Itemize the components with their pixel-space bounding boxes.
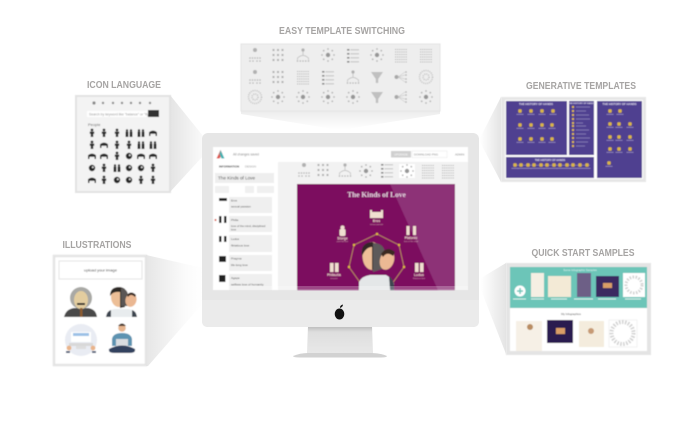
stand neck [307,326,373,353]
template: middle list: THE HISTORY OF HANDS [568,102,595,105]
sidebar row: Ludus [219,235,272,252]
sidebar row: Philia [214,216,272,232]
connector: template switching shadow [241,111,440,130]
teal banner [510,267,647,308]
app logo [216,150,224,158]
template: right poster [597,101,642,178]
chin [202,300,479,327]
save status: All changes saved [233,152,259,156]
category label: People [88,122,101,127]
sidebar row: Pragma: Pragma [231,256,242,260]
node: Platonic: Platonic [405,236,418,240]
node: Platonic: love of the mind [404,240,418,243]
sidebar: INFORMATION [219,164,239,168]
apple logo [335,304,344,320]
connector: illustrations shadow [146,255,203,366]
connector: quick start shadow [481,263,506,354]
sidebar row: Ludus: flirtatious love [231,244,250,248]
sample cards [531,273,544,297]
node: Ludus [413,263,426,280]
heading: generative templates: GENERATIVE TEMPLATES [526,81,636,92]
illustration: Einstein [64,287,97,317]
sidebar row: Agape [219,274,272,290]
heading: illustrations: ILLUSTRATIONS [62,240,132,251]
panel: template switching [241,44,440,111]
sidebar row: Agape: selfless love of humanity [231,282,264,286]
template: left poster: THE HISTORY OF HANDS [519,102,553,106]
sidebar row: Pragma: life-long love [231,263,248,267]
template thumbnails [248,48,433,104]
panel: generative templates [501,97,646,182]
node: Eros: Eros [373,219,380,223]
sidebar row: Philia: love of the mind, disciplined [231,224,266,228]
node: Platonic [404,226,418,243]
sidebar: The Kinds of Love [218,176,255,180]
search bar: Search by keyword like "balance" or "fly" [89,112,151,116]
toolbar buttons: UPGRADE [394,152,408,156]
illustration: person with laptop [109,324,135,353]
saved cards [516,320,637,351]
icon tabs [92,101,151,105]
add button [514,286,526,296]
node: Storge [337,226,349,243]
connector: icon language shadow [170,95,203,192]
teal banner: Some Infographic Samples [563,268,597,272]
toolbar buttons [391,151,464,158]
template picker [298,163,454,178]
illustration: laptop circle [65,324,97,356]
connector: generative templates shadow [480,97,501,182]
sidebar [214,162,468,290]
node: Storge: parental love [337,240,349,243]
sidebar row: Philia: Philia [231,218,239,222]
template: right poster: THE HISTORY OF HANDS [603,102,637,106]
sidebar row: Eros: Eros [231,198,238,202]
toolbar buttons: DOWNLOAD PNG [414,152,439,156]
heading: icon language: ICON LANGUAGE [87,80,161,91]
sidebar row: Philia: love [231,228,237,232]
stand base [293,353,387,358]
canvas title: The Kinds of Love [347,190,406,199]
node: Philautia: Philautia [327,273,341,277]
screen [213,147,468,290]
panel: quick start samples [506,263,651,355]
heading: easy template switching: EASY TEMPLATE SWITCHING [279,26,405,37]
illustration: two faces [106,287,138,317]
node: Ludus: Ludus [414,273,424,277]
toolbar buttons: ADMIN [455,152,464,156]
heptagon with portrait [348,233,405,290]
screen fade [213,286,468,290]
infographic canvas [297,184,455,290]
node: Ludus: flirtatious love [413,277,426,280]
section label: My Infographics [561,312,581,316]
upload box: upload your image [84,268,118,272]
template: bottom strip: THE HISTORY OF HANDS [535,159,566,162]
heading: quick start samples: QUICK START SAMPLES [532,248,635,259]
sidebar row: Agape: Agape [231,276,240,280]
panel: icon language [76,96,170,192]
icon grid [88,129,157,184]
node: Eros [370,210,383,226]
sidebar row: Eros: sexual passion [231,204,251,208]
sample label row [513,298,641,300]
template: left poster [506,101,567,155]
node: Philautia [327,263,341,280]
sidebar: DESIGN [245,164,256,168]
sidebar row: Eros [219,197,272,213]
node: Eros: sexual passion [370,224,383,226]
template: bottom strip [506,157,594,178]
sidebar row: Ludus: Ludus [231,237,240,241]
node: Storge: Storge [337,236,348,240]
monitor [202,133,479,358]
sidebar row: Pragma [219,255,272,271]
bezel [202,133,479,327]
node: Philautia: self-love [330,278,339,280]
template: middle list [568,101,595,155]
panel: illustrations [54,256,146,365]
